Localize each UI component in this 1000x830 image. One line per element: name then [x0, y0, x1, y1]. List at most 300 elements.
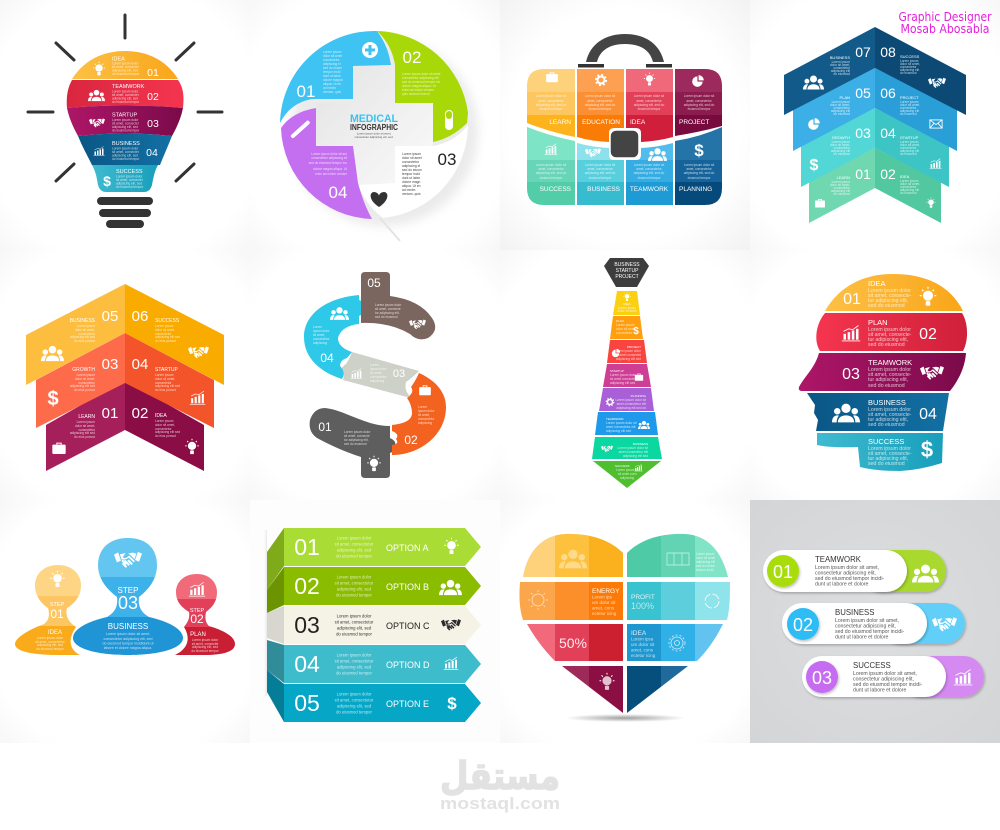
bulb band: teamwork: [67, 80, 183, 108]
head band: success: tur adipiscing elit,: [868, 456, 908, 462]
arrow layer: steps 05 and 06: PROJECT: [900, 95, 919, 100]
arrow layer: steps 07 and 08: do eiusmod: [900, 71, 917, 75]
heart cell: energy: um dolor sit: [592, 600, 616, 605]
arrow row 02: 02: [294, 573, 320, 599]
arrow layer: steps 03 and 04: adipiscing elit sed: [155, 384, 180, 388]
arrow layer: steps 03 and 04: dolor sit amet,: [900, 143, 920, 147]
bulb band: business: do eiusmod tempor: [112, 157, 140, 161]
bulb band: success: sit amet, consectet: [116, 178, 143, 182]
bag cell: education: eiusmod tempor: [589, 107, 612, 111]
arrow layer: steps 07 and 08: [784, 27, 966, 115]
bulb band: teamwork: Lorem ipsum dolor: [112, 90, 139, 94]
bulb band: business: [78, 134, 172, 165]
arrow layer: steps 03 and 04: $: [810, 157, 819, 174]
medical segment 02: sed do eiusmod tempor inc: [402, 80, 441, 84]
bag cell: education: adipiscing elit, sed do: [585, 103, 615, 107]
panel: people steps: [0, 500, 250, 743]
puzzle piece 04: consectetur: [313, 337, 330, 341]
arrow layer: steps 05 and 06: consectetur: [834, 106, 851, 110]
head band: teamwork: tur adipiscing elit,: [868, 377, 908, 383]
bag cell: business: BUSINESS: [587, 186, 621, 193]
bulb band: idea: Lorem ipsum dolor: [112, 62, 139, 66]
arrow row 03: Lorem ipsum dolor: [337, 614, 372, 618]
pill 03 success: 03: [812, 668, 832, 688]
pill 02 business: consectetur adipiscing elit,: [835, 624, 896, 630]
bag cell: planning: Lorem ipsum dolor sit: [684, 163, 714, 167]
head band: success: $: [921, 437, 933, 462]
person: step 01: do eiusmod tempor: [36, 647, 65, 651]
tie knot: PROJECT: [615, 274, 639, 280]
arrow row 02: adipiscing elit, sed: [337, 586, 372, 592]
arrow layer: steps 01 and 02: Lorem ipsum: [832, 180, 850, 184]
arrow layer: steps 07 and 08: do eiusmod: [834, 72, 850, 76]
pill 02 business: [782, 603, 965, 644]
person: step 02: [175, 574, 235, 655]
pill 02 business: dunt ut labore et dolore: [835, 634, 888, 640]
puzzle piece 04: 04: [320, 351, 334, 365]
arrow layer: steps 05 and 06: adipiscing elit: [831, 109, 850, 113]
arrow layer: steps 05 and 06: adipiscing elit sed: [155, 335, 180, 339]
bag cell: teamwork: eiusmod tempor: [638, 176, 661, 180]
arrow layer: steps 05 and 06: [26, 284, 224, 385]
arrow layer: steps 01 and 02: consectetur: [79, 428, 96, 432]
person: step 03: BUSINESS: [108, 622, 148, 631]
tie segment: success: SUCCESS: [615, 464, 630, 468]
head band: teamwork: 03: [842, 366, 860, 383]
heart ground shadow: [565, 714, 685, 722]
pill 02 business: 02: [793, 615, 813, 635]
head band: plan: Lorem ipsum dolor: [868, 327, 911, 333]
bag cell: learn: Lorem ipsum dolor sit: [536, 94, 566, 98]
person: step 02: Lorem ipsum dolor: [192, 638, 219, 642]
arrow row 02: do eiusmod tempor: [336, 592, 373, 598]
bag cell: idea: amet, consectetur: [636, 99, 663, 103]
puzzle piece 02: adipiscing: [418, 421, 432, 425]
bulb band: business: 04: [146, 147, 158, 159]
puzzle piece 04: ipsum dolor: [313, 329, 330, 333]
heart cell: energy: [519, 582, 623, 620]
bulb band: success: adipiscing elit, sed: [116, 182, 142, 186]
arrow layer: steps 05 and 06: dolor sit amet,: [830, 103, 850, 107]
arrow layer: steps 03 and 04: 03: [855, 125, 871, 141]
arrow layer: steps 05 and 06: Lorem ipsum: [77, 324, 95, 328]
bulb band: teamwork: 02: [147, 91, 159, 103]
bulb band: success: SUCCESS: [116, 169, 143, 175]
puzzle piece 05: tur adipiscing elit,: [375, 311, 400, 315]
arrow layer: steps 03 and 04: do eius pomod: [74, 388, 95, 392]
footer logo: mostaql: [440, 754, 560, 813]
head band: plan: [816, 313, 967, 351]
arrow layer: steps 05 and 06: do eiusmod: [900, 112, 917, 116]
head band: idea: tur adipiscing elit,: [868, 298, 908, 304]
bag cell: teamwork: amet, consectetur: [636, 167, 663, 171]
tie segment: plan: consectetur: [616, 331, 633, 335]
puzzle piece 03: Lorem: [370, 363, 379, 367]
bulb band: idea: IDEA: [112, 56, 125, 62]
head band: idea: Lorem ipsum dolor: [868, 288, 911, 294]
bulb band: business: sit amet, consectet: [112, 150, 139, 154]
bag cell: idea: adipiscing elit, sed do: [634, 103, 664, 107]
head band: idea: sed do eiusmod: [868, 303, 905, 309]
arrow row 01: OPTION A: [386, 543, 429, 553]
heart cell: 50 percent: [527, 624, 623, 661]
medical segment 03: dolore magn: [402, 180, 420, 184]
arrow layer: steps 01 and 02: dolor sit amet,: [75, 424, 95, 428]
tie segment: success: sit amet cons: [618, 472, 637, 476]
heart cell: idea: um dolor sit: [631, 642, 655, 647]
bulb band: success: Lorem ipsum dolor: [116, 174, 143, 178]
medical segment 01: sed do eiusm: [323, 66, 342, 70]
arrow layer: steps 05 and 06: consectetur: [155, 332, 172, 336]
bulb band: startup: [67, 106, 183, 136]
bag cell: planning: $: [694, 141, 704, 160]
head band: success: sit amet, consecte-: [868, 451, 912, 457]
pill 03 success: dunt ut labore et dolore: [853, 688, 906, 694]
puzzle piece 04: sit amet,: [313, 333, 325, 337]
puzzle piece 01: Lorem ipsum dolor: [344, 430, 371, 434]
bulb band: startup: do eiusmod tempor: [112, 128, 140, 132]
head band: business: [807, 393, 949, 431]
bulb band: startup: 03: [147, 118, 159, 130]
bag cell: success: SUCCESS: [540, 186, 572, 193]
arrow layer: steps 03 and 04: GROWTH: [72, 367, 95, 373]
arrow layer: steps 07 and 08: Lorem ipsum: [832, 60, 850, 64]
arrow row 04: Lorem ipsum dolor: [337, 652, 372, 658]
head band: business: Lorem ipsum dolor: [868, 407, 911, 413]
pill 03 success: sed do eiusmod tempor incidi-: [853, 682, 922, 688]
pill 02 business: BUSINESS: [835, 608, 874, 617]
arrow layer: steps 01 and 02: Lorem ipsum: [155, 419, 174, 423]
tie segment: idea: Lorem ipsum: [618, 306, 637, 310]
pill 01 teamwork: sed do eiusmod tempor incidi-: [815, 576, 884, 582]
head band: business: BUSINESS: [868, 398, 906, 407]
arrow layer: steps 05 and 06: dolor sit amet,: [75, 328, 95, 332]
tie segment: teamwork: adipiscing elit sed: [606, 429, 631, 433]
arrow layer: steps 01 and 02: adipiscing elit sed: [70, 431, 95, 435]
head band: teamwork: TEAMWORK: [868, 358, 912, 367]
bag cell: education: [577, 69, 624, 142]
arrow layer: steps 01 and 02: do eiusmod: [900, 191, 917, 195]
person: step 03: Lorem ipsum dolor sit amet,: [106, 632, 150, 636]
arrow layer: steps 07 and 08: BUSINESS: [830, 55, 850, 60]
arrow layer: steps 01 and 02: IDEA: [155, 413, 167, 419]
arrow row 02: [267, 567, 481, 613]
arrow layer: steps 01 and 02: dolor sit amet,: [830, 183, 850, 187]
heart cell: idea: [627, 624, 723, 661]
tie segment: plan: dolor sit amet: [616, 327, 635, 331]
bag cell: teamwork: Lorem ipsum dolor sit: [634, 163, 664, 167]
tie segment: success: adipiscing: [620, 476, 634, 480]
pill 01 teamwork: [763, 550, 946, 592]
tie segment: planning: [599, 388, 654, 411]
arrow row 04: sit amet, consectetur: [335, 658, 374, 664]
puzzle piece 01: tur adipiscing elit,: [344, 438, 369, 442]
arrow layer: steps 03 and 04: consectetur: [79, 381, 96, 385]
head band: teamwork: Lorem ipsum dolor: [868, 367, 911, 373]
bag cell: project: eiusmod tempor: [688, 107, 711, 111]
arrow layer: steps 01 and 02: Lorem ipsum: [77, 420, 95, 424]
tie segment: startup: [603, 364, 651, 387]
bulb band: business: Lorem ipsum dolor: [112, 146, 139, 150]
arrow layer: steps 03 and 04: 04: [132, 356, 148, 373]
arrow row 03: do eiusmod tempor: [336, 632, 373, 636]
person: step 01: IDEA: [48, 630, 62, 636]
heart cell: profit: 100%: [631, 601, 654, 611]
medical segment 02: quis nostrud exercit: [402, 92, 430, 96]
heart cell: profit: [627, 582, 730, 620]
bag cell: planning: eiusmod tempor: [688, 176, 711, 180]
person: step 01: sit amet, consectetur: [35, 640, 66, 644]
arrow layer: steps 07 and 08: Lorem ipsum: [900, 59, 919, 63]
bulb band: idea: adipiscing elit, sed: [112, 68, 138, 72]
tie segment: teamwork: TEAMWORK: [606, 417, 624, 421]
arrow layer: steps 05 and 06: adipiscing elit: [900, 109, 919, 113]
puzzle piece 04: adipiscing: [313, 341, 327, 345]
puzzle piece 05: Lorem ipsum dolor: [375, 303, 402, 307]
arrow row 04: adipiscing elit, sed: [337, 664, 372, 670]
arrow row 05: 05: [294, 690, 320, 716]
person: step 03: [73, 538, 183, 655]
bulb band: success: $: [103, 173, 111, 189]
arrow row 05: do eiusmod tempor: [336, 710, 373, 714]
arrow layer: steps 01 and 02: 02: [880, 166, 896, 182]
arrow row 05: sit amet, consectetur: [335, 698, 374, 702]
medical segment 04: dolore magna aliqua. Ut: [313, 167, 347, 171]
person: step 01: Lorem ipsum dolor: [37, 636, 64, 640]
panel: head infographic: [750, 250, 1000, 500]
arrow layer: steps 03 and 04: consectetur: [900, 146, 917, 150]
heart cell: energy: ENERGY: [592, 588, 620, 595]
arrow row 04: [267, 640, 481, 683]
heart cell: bottom left: [562, 666, 623, 713]
designer credit: Mosab Abosabla: [900, 22, 990, 36]
tie segment: startup: Lorem ipsum dolor: [610, 373, 637, 377]
footer logo: mostaql: mostaql.com: [440, 794, 560, 813]
tie segment: success: [593, 461, 661, 488]
bag cell: business: Lorem ipsum dolor sit: [585, 163, 615, 167]
arrow layer: steps 01 and 02: Lorem ipsum: [900, 179, 919, 183]
arrow layer: steps 07 and 08: 08: [880, 44, 896, 60]
arrow layer: steps 01 and 02: LEARN: [837, 175, 850, 180]
arrow layer: steps 03 and 04: Lorem ipsum: [832, 140, 850, 144]
panel: heart infographic: [500, 500, 750, 743]
tie segment: business: amet consectetur elit: [619, 450, 648, 454]
arrow row 05: $: [447, 694, 457, 713]
medical segment 01: adipiscing el: [323, 62, 341, 66]
puzzle piece 03: sit amet,: [370, 371, 382, 375]
bulb band: idea: 01: [147, 67, 159, 79]
bulb band: teamwork: adipiscing elit, sed: [112, 96, 138, 100]
arrow layer: steps 01 and 02: consectetur: [834, 186, 851, 190]
panel: eight step arrows: [750, 0, 1000, 250]
heart cell: idea: amet, cons: [631, 648, 654, 652]
arrow layer: steps 05 and 06: do eius pomod: [155, 339, 176, 343]
bag cell: planning: amet, consectetur: [686, 167, 713, 171]
pill 01 teamwork: Lorem ipsum dolor sit amet,: [815, 565, 879, 571]
bulb band: teamwork: do eiusmod tempor: [112, 100, 140, 104]
arrow layer: steps 03 and 04: Lorem ipsum: [900, 140, 919, 144]
tie segment: planning: PLANNING: [631, 394, 647, 398]
bag cell: success: amet, consectetur: [538, 167, 565, 171]
bulb band: success: [92, 165, 158, 192]
pill 02 business: sed do eiusmod tempor incidi-: [835, 629, 904, 635]
arrow layer: steps 03 and 04: do eiusmod: [900, 152, 917, 156]
person: step 01: [15, 565, 81, 655]
bag cell: learn: adipiscing elit, sed do: [536, 103, 566, 107]
medical segment 03: dunt ut labor: [402, 176, 421, 180]
puzzle piece 02: sit amet,: [418, 413, 430, 417]
puzzle piece 03: adipiscing: [370, 379, 384, 383]
medical segment 01: ad minim: [323, 86, 336, 90]
arrow layer: steps 05 and 06: SUCCESS: [155, 318, 180, 324]
puzzle piece 05: [361, 272, 435, 339]
arrow layer: steps 03 and 04: Lorem ipsum: [77, 373, 95, 377]
heart cell: idea: IDEA: [631, 630, 647, 637]
bulb band: idea: [72, 51, 178, 79]
arrow layer: steps 03 and 04: adipiscing elit sed: [70, 384, 95, 388]
heart cell: idea: ectetur icing: [631, 653, 656, 658]
tie segment: success: Lorem ipsum do: [616, 468, 639, 472]
tie segment: teamwork: [595, 412, 658, 435]
panel: six step arrows: [0, 250, 250, 500]
arrow layer: steps 03 and 04: dolor sit amet,: [830, 143, 850, 147]
arrow layer: steps 01 and 02: 02: [132, 405, 148, 422]
medical segment 01: consectetur: [323, 58, 340, 62]
bag cell: planning: adipiscing elit, sed do: [684, 171, 714, 175]
tie knot: STARTUP: [616, 268, 639, 274]
person: step 01: STEP: [50, 602, 65, 608]
medical title: INFOGRAPHIC: [350, 123, 398, 132]
arrow layer: steps 01 and 02: adipiscing elit sed: [155, 430, 180, 434]
head band: success: sed do eiusmod: [868, 461, 905, 467]
heart cell: top right: adipiscing elit: [696, 560, 715, 564]
pill 01 teamwork: TEAMWORK: [815, 555, 862, 564]
panel: tie infographic: [500, 250, 750, 500]
medical segment 04: Lorem ipsum dolor sit am: [311, 152, 347, 156]
tie segment: startup: STARTUP: [610, 369, 624, 373]
bag cell: planning: PLANNING: [679, 186, 712, 193]
arrow row 03: OPTION C: [386, 621, 430, 631]
pill 03 success: [802, 656, 984, 697]
long shadow: [290, 38, 478, 241]
pill 03 success: SUCCESS: [853, 661, 891, 670]
arrow row 05: [267, 670, 481, 722]
bag cell: success: adipiscing elit, sed do: [536, 171, 566, 175]
heart cell: profit: PROFIT: [631, 594, 655, 601]
arrow layer: steps 05 and 06: consectetur: [79, 332, 96, 336]
heart cell: top right: [627, 534, 728, 577]
arrow row 01: [267, 528, 481, 590]
arrow layer: steps 05 and 06: adipiscing elit sed: [70, 335, 95, 339]
heart cell: top right: dolor sit amet: [696, 556, 715, 560]
person: step 01: 01: [50, 607, 64, 621]
puzzle piece 01: sit amet, consecte: [344, 434, 370, 438]
bag cell: business: [577, 143, 624, 205]
heart cell: energy: ectetur icing: [592, 611, 617, 616]
medical segment 01: aliqua. Ut en: [323, 82, 341, 86]
arrow layer: steps 03 and 04: consectetur: [155, 381, 172, 385]
bag cell: project: PROJECT: [679, 119, 709, 126]
puzzle piece 03: [341, 352, 419, 397]
arrow layer: steps 03 and 04: STARTUP: [155, 367, 179, 373]
puzzle piece 02: [392, 373, 446, 455]
bag cell: teamwork: [626, 143, 673, 205]
heart cell: top right: sed do eiusm: [696, 564, 715, 568]
tie segment: project: Lorem ipsum dolor: [615, 349, 642, 353]
arrow layer: steps 05 and 06: 06: [132, 308, 148, 325]
tie segment: plan: PLAN: [616, 319, 624, 323]
medical segment 04: [281, 108, 372, 219]
person: step 02: PLAN: [190, 632, 206, 638]
head band: success: [817, 433, 943, 471]
bulb band: teamwork: sit amet, consectet: [112, 93, 139, 97]
arrow layer: steps 05 and 06: 06: [880, 85, 896, 101]
head band: idea: [825, 274, 963, 311]
bulb band: teamwork: TEAMWORK: [112, 84, 145, 90]
head band: plan: tur adipiscing elit,: [868, 337, 908, 343]
arrow row 05: OPTION E: [386, 699, 429, 709]
bag cell: planning: [675, 127, 722, 205]
puzzle piece 02: 02: [404, 433, 418, 447]
medical segment 04: 04: [329, 183, 347, 202]
arrow layer: steps 05 and 06: 05: [855, 85, 871, 101]
arrow layer: steps 01 and 02: dolor sit amet,: [155, 423, 175, 427]
medical segment 03: sed do eiusm: [402, 168, 422, 172]
pill 03 success: consectetur adipiscing elit,: [853, 676, 914, 682]
arrow layer: steps 03 and 04: [801, 108, 949, 187]
medical segment 02: enim ad minim veniam: [402, 88, 434, 92]
arrow row 04: 04: [294, 651, 320, 677]
tie knot: BUSINESS: [614, 262, 640, 268]
arrow row 04: OPTION D: [386, 660, 430, 670]
puzzle piece 03: 03: [393, 368, 405, 380]
heart cell: bottom right: [627, 666, 688, 713]
medical segment 03: tempor incid: [402, 172, 420, 176]
arrow row 05: Lorem ipsum dolor: [337, 692, 372, 696]
arrow row 01: 01: [294, 534, 320, 560]
arrow layer: steps 01 and 02: consectetur: [900, 185, 917, 189]
tie segment: project: PROJECT: [627, 345, 641, 349]
medical segment 02: Lorem ipsum dolor sit amet: [402, 72, 441, 76]
arrow layer: steps 01 and 02: adipiscing elit: [900, 188, 919, 192]
medical title: [350, 113, 398, 139]
puzzle piece 05: 05: [367, 276, 381, 290]
heart cell: top left: [523, 534, 623, 577]
medical segment 04: consectetur adipiscing eli: [311, 156, 347, 160]
arrow row 02: Lorem ipsum dolor: [337, 574, 372, 580]
arrow layer: steps 03 and 04: adipiscing elit: [831, 149, 850, 153]
tie segment: startup: sit amet consectet: [610, 377, 636, 381]
medical segment 03: Lorem ipsum: [402, 152, 421, 156]
bag cell: success: Lorem ipsum dolor sit: [536, 163, 566, 167]
pill 01 teamwork: dunt ut labore et dolore: [815, 582, 868, 588]
designer credit: [898, 10, 992, 36]
bulb band: startup: adipiscing elit, sed: [112, 125, 138, 129]
medical segment 01: dunt ut labor: [323, 74, 342, 78]
tie segment: planning: Lorem ipsum dolor sit: [616, 398, 646, 402]
arrow layer: steps 03 and 04: 03: [102, 356, 118, 373]
arrow layer: steps 03 and 04: Lorem ipsum: [155, 373, 174, 377]
bulb band: business: adipiscing elit, sed: [112, 154, 138, 158]
medical title: Lorem ipsum dolor sit amet,: [357, 132, 391, 136]
bulb rays: [28, 15, 222, 181]
designer credit: Graphic Designer: [898, 10, 992, 24]
puzzle piece 03: consectetur: [370, 375, 387, 379]
arrow layer: steps 01 and 02: dolor sit amet,: [900, 182, 920, 186]
person: step 03: labore et dolore magna aliqua.: [104, 646, 152, 650]
heart cell: energy: amet, cons: [592, 606, 615, 610]
arrow row 01: do eiusmod tempor: [336, 554, 373, 558]
